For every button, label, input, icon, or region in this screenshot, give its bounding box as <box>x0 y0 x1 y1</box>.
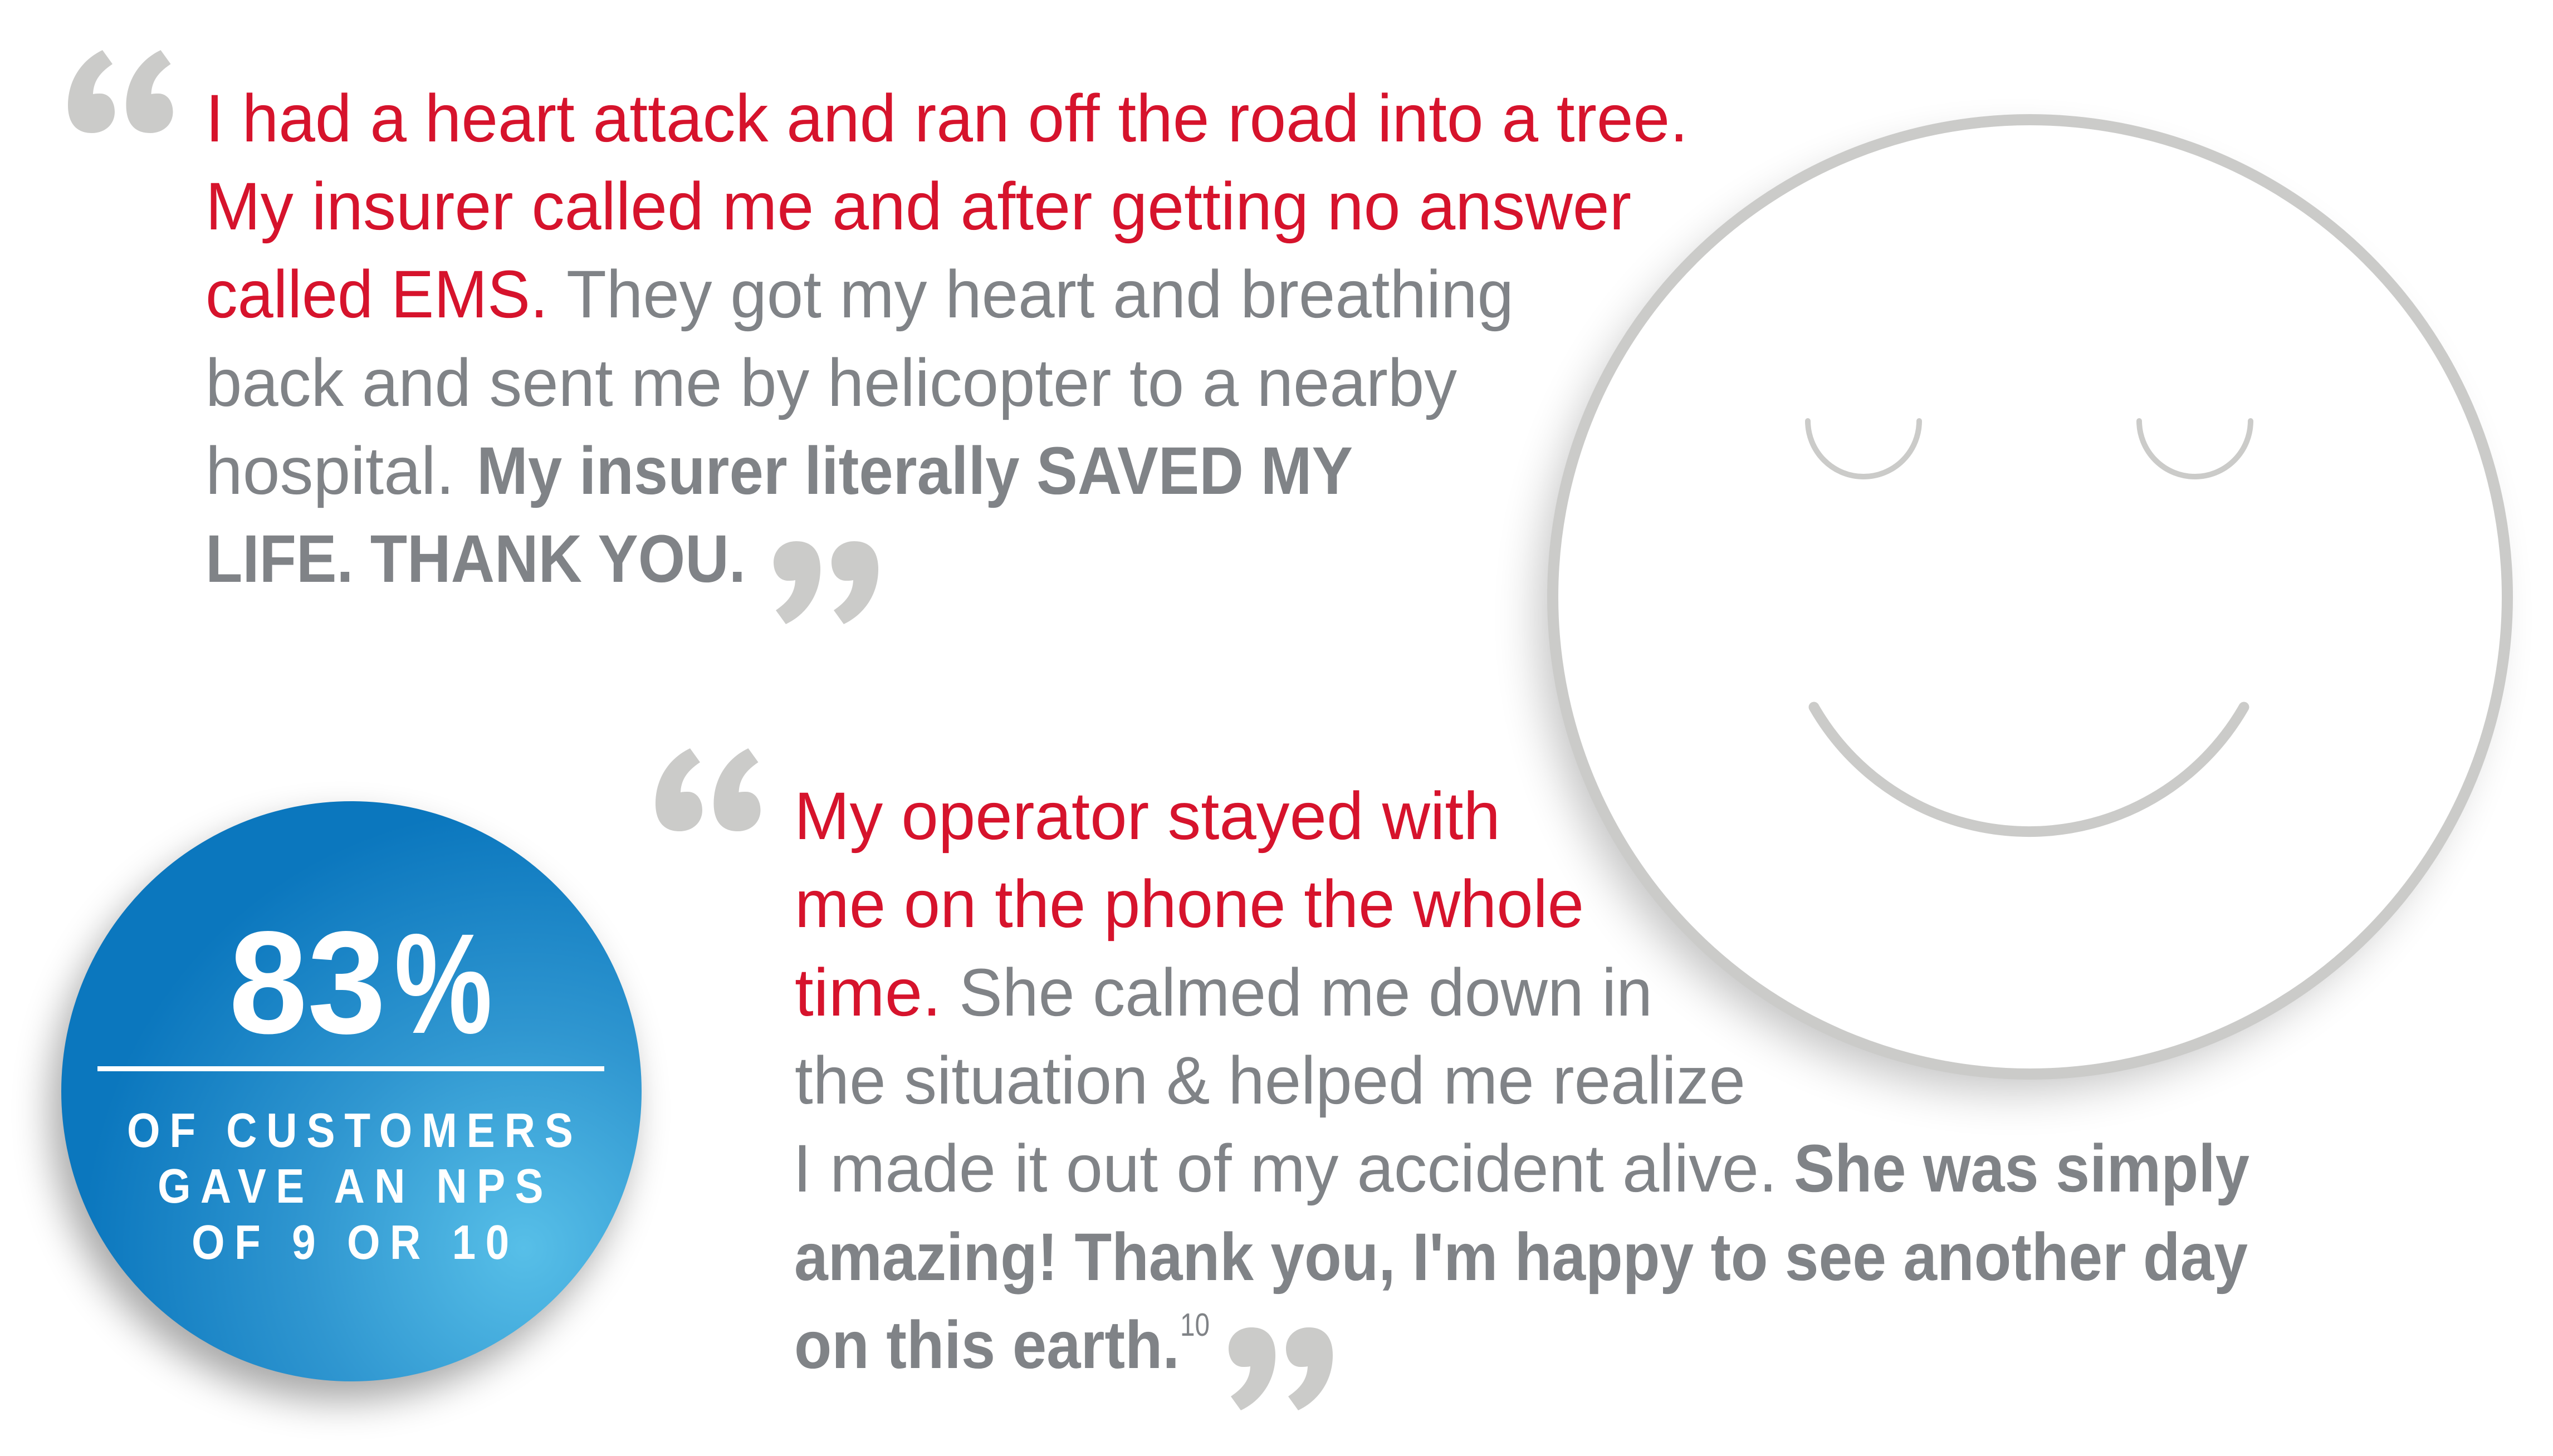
icon: left closed eye <box>1808 421 1919 477</box>
stat: 83% <box>229 901 492 1064</box>
text block: first quote: back and sent me by helicopter to a nearby <box>206 345 1457 420</box>
text block: second quote: 10 <box>1180 1307 1210 1343</box>
text block: first quote: I had a heart attack and ran off the road into a tree. <box>206 80 1688 156</box>
caption: of customers gave an NPS of 9 or 10 <box>127 1104 573 1269</box>
text block: second quote: on this earth. <box>794 1307 1180 1383</box>
icon: right closed eye <box>2139 421 2251 477</box>
text block: second quote: She was simply <box>1794 1130 2249 1206</box>
text block: first quote: They got my heart and breathing <box>566 256 1514 332</box>
text block: second quote: My operator stayed with <box>794 778 1500 854</box>
stat: 83%: 83 <box>229 901 386 1064</box>
text block: first quote: My insurer literally SAVED MY <box>477 433 1353 508</box>
panel: 83% statistic badge <box>51 801 642 1401</box>
caption: of customers gave an NPS of 9 or 10: OF CUSTOMERS <box>127 1104 573 1158</box>
caption: of customers gave an NPS of 9 or 10: OF 9 OR 10 <box>192 1215 509 1269</box>
text block: second quote: me on the phone the whole <box>795 866 1584 942</box>
text block: first quote: LIFE. THANK YOU. <box>206 521 746 596</box>
caption: of customers gave an NPS of 9 or 10: GAVE AN NPS <box>158 1159 544 1213</box>
panel: first testimonial <box>68 50 1688 624</box>
text block: first quote: My insurer called me and after getting no answer <box>206 168 1631 244</box>
icon: opening quote mark <box>68 50 173 133</box>
text block: second quote <box>793 778 2249 1383</box>
icon: smiley face <box>1540 120 2507 1090</box>
icon: smile <box>1814 707 2244 832</box>
text block: first quote <box>206 80 1688 596</box>
icon: closing quote mark <box>1229 1327 1333 1410</box>
text block: second quote: I made it out of my accident alive. <box>793 1130 1777 1206</box>
text block: second quote: the situation & helped me realize <box>795 1042 1745 1118</box>
text block: first quote: called EMS. <box>206 256 548 332</box>
text block: second quote: time. <box>795 954 941 1030</box>
text block: first quote: hospital. <box>206 433 454 508</box>
stat: 83%: % <box>394 904 492 1063</box>
icon: opening quote mark <box>656 748 761 831</box>
text block: second quote: amazing! Thank you, I'm happy to see another day <box>794 1219 2248 1295</box>
panel: second testimonial <box>656 748 2249 1410</box>
icon: closing quote mark <box>774 541 878 624</box>
divider <box>97 1066 604 1071</box>
text block: second quote: She calmed me down in <box>959 954 1652 1030</box>
